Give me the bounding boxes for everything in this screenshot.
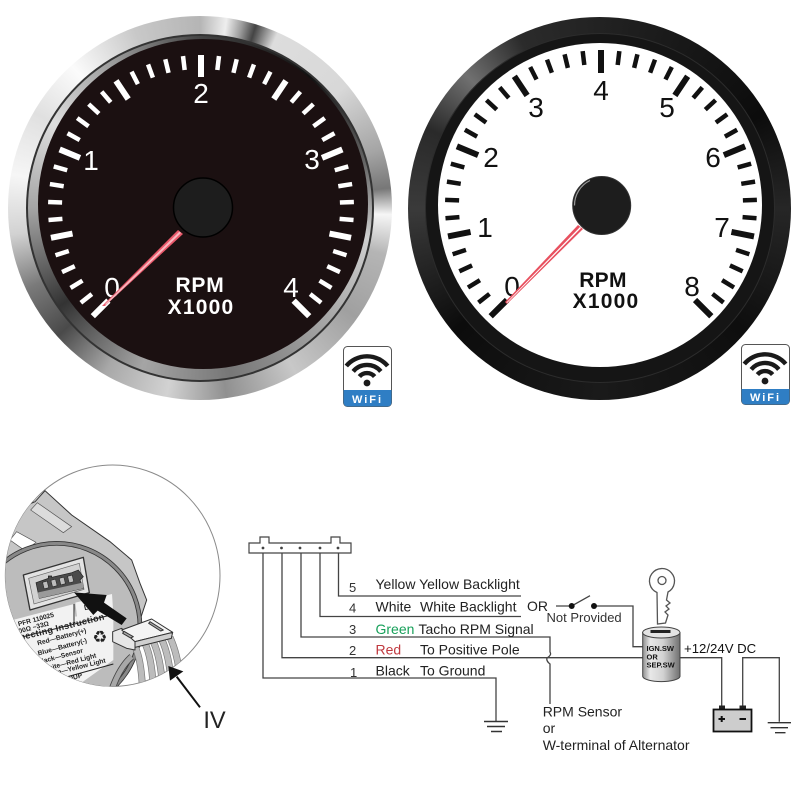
scale numbers: 5 (659, 92, 675, 123)
inset illustration (5, 490, 181, 686)
connector wires (135, 637, 180, 693)
unit label: X1000 (573, 290, 639, 313)
panel: white dial tachometer with black bezel, 0-8 RPM (408, 17, 791, 405)
icon: WiFi badge (741, 344, 790, 405)
icon: recycling symbol: ♻ (93, 628, 107, 647)
switch, not provided: Not Provided (546, 610, 622, 625)
icon: WiFi badge: WiFi (352, 394, 383, 406)
white wire connector (113, 619, 173, 650)
socket recess (23, 557, 89, 610)
instruction label: Lot:01 (83, 599, 106, 612)
wire number labels (349, 580, 357, 680)
instruction label: White—Red Light (42, 652, 98, 674)
wire number labels: 5 (349, 580, 356, 595)
black bezel outer ring (408, 17, 791, 400)
scale numbers: 0 (504, 271, 520, 302)
panel: black dial tachometer with chrome bezel, 0-4 RPM (8, 16, 392, 407)
instruction label: Connecting Instruction (1, 612, 105, 647)
bezel inner ring (426, 34, 774, 382)
scale numbers: 1 (477, 212, 493, 243)
gauge housing flange (0, 491, 147, 693)
centre hub (174, 178, 232, 237)
scale numbers: 4 (283, 272, 299, 303)
callout label IV: IV (203, 708, 226, 734)
wire number labels: 4 (349, 600, 356, 616)
instruction label: GROUP (58, 672, 84, 685)
scale numbers: 3 (528, 92, 544, 123)
cable behind the connector (112, 657, 132, 690)
wire number labels: 1 (350, 665, 357, 680)
wire function labels: To Positive Pole (420, 642, 520, 658)
icon: ignition key (649, 569, 674, 624)
instruction label: Blue—Battery(-) (37, 638, 88, 657)
scale numbers: 2 (483, 142, 499, 173)
wires from connector (263, 553, 643, 721)
switch, not provided (546, 596, 643, 647)
arrow: pointer to connector (168, 666, 200, 707)
white dial face (438, 43, 762, 367)
ignition switch cylinder: SEP.SW (646, 660, 676, 670)
scale numbers: 8 (684, 271, 700, 302)
scale numbers (477, 75, 730, 302)
dial markings, needle and hub (445, 50, 757, 318)
wire function labels: White Backlight (420, 598, 517, 614)
scale numbers: 7 (714, 212, 730, 243)
red needle (505, 225, 583, 304)
black dial face (38, 39, 368, 369)
wire number labels: 2 (349, 643, 356, 658)
sensor label: RPM Sensor (543, 704, 622, 720)
icon: ground symbol right (768, 723, 791, 733)
wire colour labels: Yellow Yellow Backlight (376, 576, 520, 592)
panel: connector close-up inset (4, 464, 226, 728)
round gauge back (5, 541, 142, 686)
red needle (102, 230, 183, 306)
icon: battery (714, 706, 752, 732)
scale numbers: 0 (104, 272, 120, 303)
centre hub (573, 176, 631, 234)
instruction label: Red—Battery(+) (37, 628, 87, 647)
wire colour labels (376, 576, 520, 678)
instruction label (14, 594, 114, 682)
sensor label: or (543, 720, 555, 736)
dial markings, needle and hub (48, 55, 354, 319)
wire function labels (418, 598, 534, 678)
connector socket (36, 570, 83, 598)
bezel inner bevel (28, 36, 372, 380)
sensor label: W-terminal of Alternator (543, 737, 690, 753)
major ticks (448, 50, 754, 316)
ignition switch cylinder (643, 627, 680, 682)
scale numbers: 2 (193, 78, 209, 109)
inset circle outline (5, 465, 220, 686)
sensor label (543, 704, 690, 753)
OR label: OR (527, 598, 548, 614)
wire colour labels: Red (376, 642, 401, 658)
bezel inner groove (425, 33, 775, 383)
unit label: RPM (579, 269, 627, 292)
wire number labels: 3 (349, 622, 356, 637)
ignition switch cylinder: OR (646, 652, 658, 662)
scale numbers (83, 78, 320, 303)
minor ticks (48, 56, 354, 303)
scale numbers: 6 (705, 142, 721, 173)
voltage label: +12/24V DC (684, 641, 757, 656)
unit label: X1000 (168, 296, 234, 319)
scale numbers: 3 (304, 144, 320, 175)
major ticks (51, 55, 351, 316)
connector block (249, 537, 351, 553)
minor ticks (445, 51, 757, 303)
icon: ground symbol left (484, 722, 508, 732)
chrome bezel outer ring (8, 16, 392, 400)
instruction label: 100Ω ~33Ω (14, 620, 50, 636)
instruction label: Black—Sensor (37, 647, 84, 666)
battery wires (680, 658, 779, 722)
wire colour labels: Green (376, 621, 414, 637)
scale numbers: 1 (83, 145, 99, 176)
instruction label: Green—Yellow Light (42, 657, 107, 680)
scale numbers: 4 (593, 75, 609, 106)
icon: WiFi badge (343, 346, 392, 407)
unit label: RPM (175, 274, 225, 297)
wire colour labels: Black (376, 662, 411, 678)
bezel inner dark line (26, 34, 374, 382)
wire function labels: Tacho RPM Signal (418, 621, 534, 637)
wire colour labels: White (376, 598, 412, 614)
unit label (573, 269, 639, 313)
icon: WiFi badge: WiFi (750, 392, 781, 404)
instruction label: PFR 110025 (17, 612, 55, 628)
ignition switch cylinder: IGN.SW (646, 644, 675, 653)
wire function labels: To Ground (420, 662, 485, 678)
arrow: insertion direction (74, 592, 127, 625)
unit label (168, 274, 234, 319)
